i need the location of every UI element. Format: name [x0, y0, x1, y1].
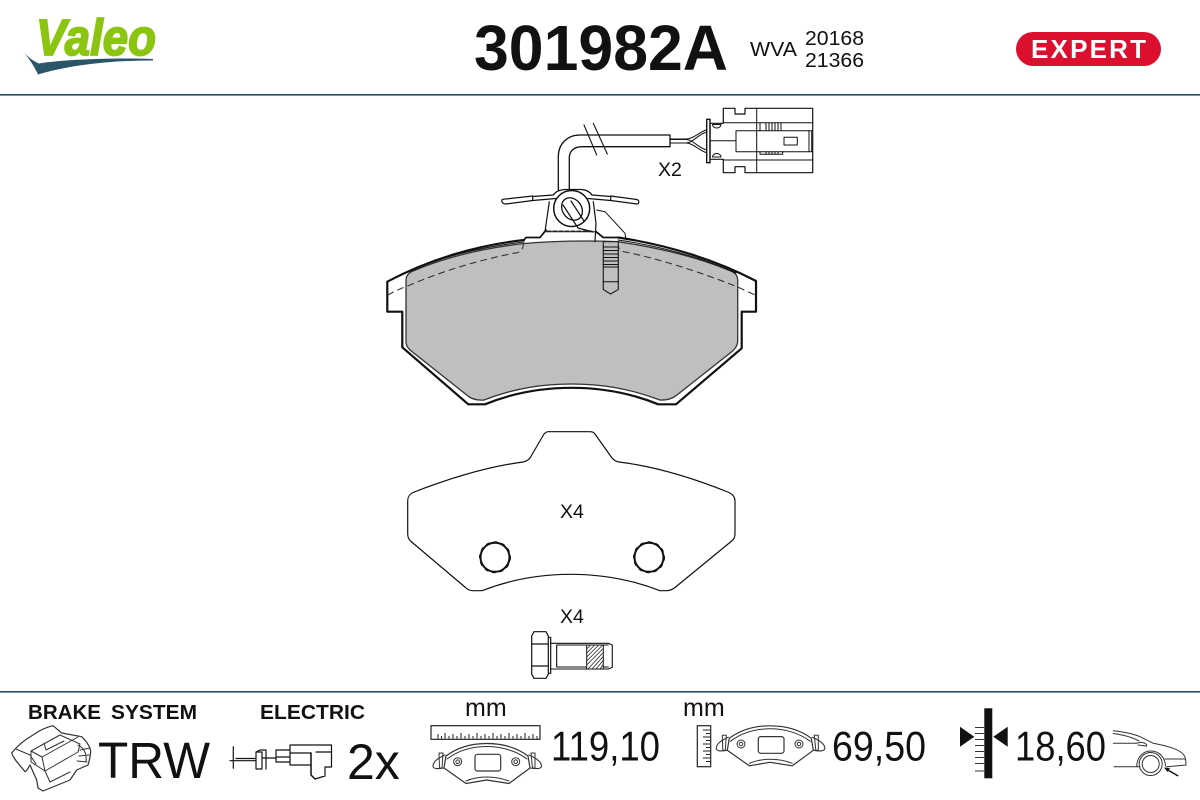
friction material — [406, 241, 738, 400]
pad — [716, 726, 825, 766]
heading: ELECTRIC: ELECTRIC — [260, 702, 365, 724]
backing plate outline — [408, 432, 735, 591]
value: height: 69,50 — [832, 722, 926, 770]
logo: Valeo: Valeo — [36, 9, 156, 66]
icon: thickness gauge — [960, 708, 1008, 778]
pad — [433, 744, 542, 784]
WVA numbers — [750, 27, 864, 72]
brake pad: front view — [387, 230, 756, 404]
wear sensor cable — [558, 123, 707, 190]
label: X4 bolt: X4 — [560, 606, 584, 628]
icon: pad with vertical ruler — [697, 726, 825, 767]
title: part number: 301982A — [474, 12, 728, 84]
badge: EXPERT: EXPERT — [1031, 34, 1146, 64]
label: TRW: TRW — [98, 732, 210, 789]
icon: electric connector — [230, 745, 332, 779]
heading: BRAKE SYSTEM: BRAKE — [28, 702, 101, 724]
value: thickness: 18,60 — [1015, 722, 1106, 770]
icon: caliper — [12, 726, 91, 791]
wear sensor pin — [603, 242, 618, 294]
backing plate — [387, 238, 756, 404]
label: X4 plate: X4 — [560, 501, 584, 523]
label: mm height: mm — [683, 694, 725, 722]
sensor clip — [502, 190, 639, 242]
icon: pad with horizontal ruler — [431, 726, 542, 784]
heading: BRAKE SYSTEM: SYSTEM — [111, 702, 197, 724]
value: width: 119,10 — [551, 722, 660, 770]
WVA numbers: WVA — [750, 39, 798, 61]
label: 2x: 2x — [347, 734, 400, 790]
WVA numbers: 21366 — [805, 49, 864, 72]
ruler — [431, 726, 540, 739]
ruler — [697, 726, 711, 767]
label: mm width: mm — [465, 694, 507, 722]
WVA numbers: 20168 — [805, 27, 864, 50]
badge: EXPERT — [1016, 32, 1161, 66]
connector — [707, 108, 813, 173]
label: X2: X2 — [658, 159, 682, 181]
heading: BRAKE SYSTEM — [28, 702, 197, 724]
holes — [480, 542, 664, 573]
icon: car with wheel arrow — [1113, 731, 1186, 776]
bolt — [532, 632, 612, 678]
dashed hidden edges — [388, 244, 524, 295]
